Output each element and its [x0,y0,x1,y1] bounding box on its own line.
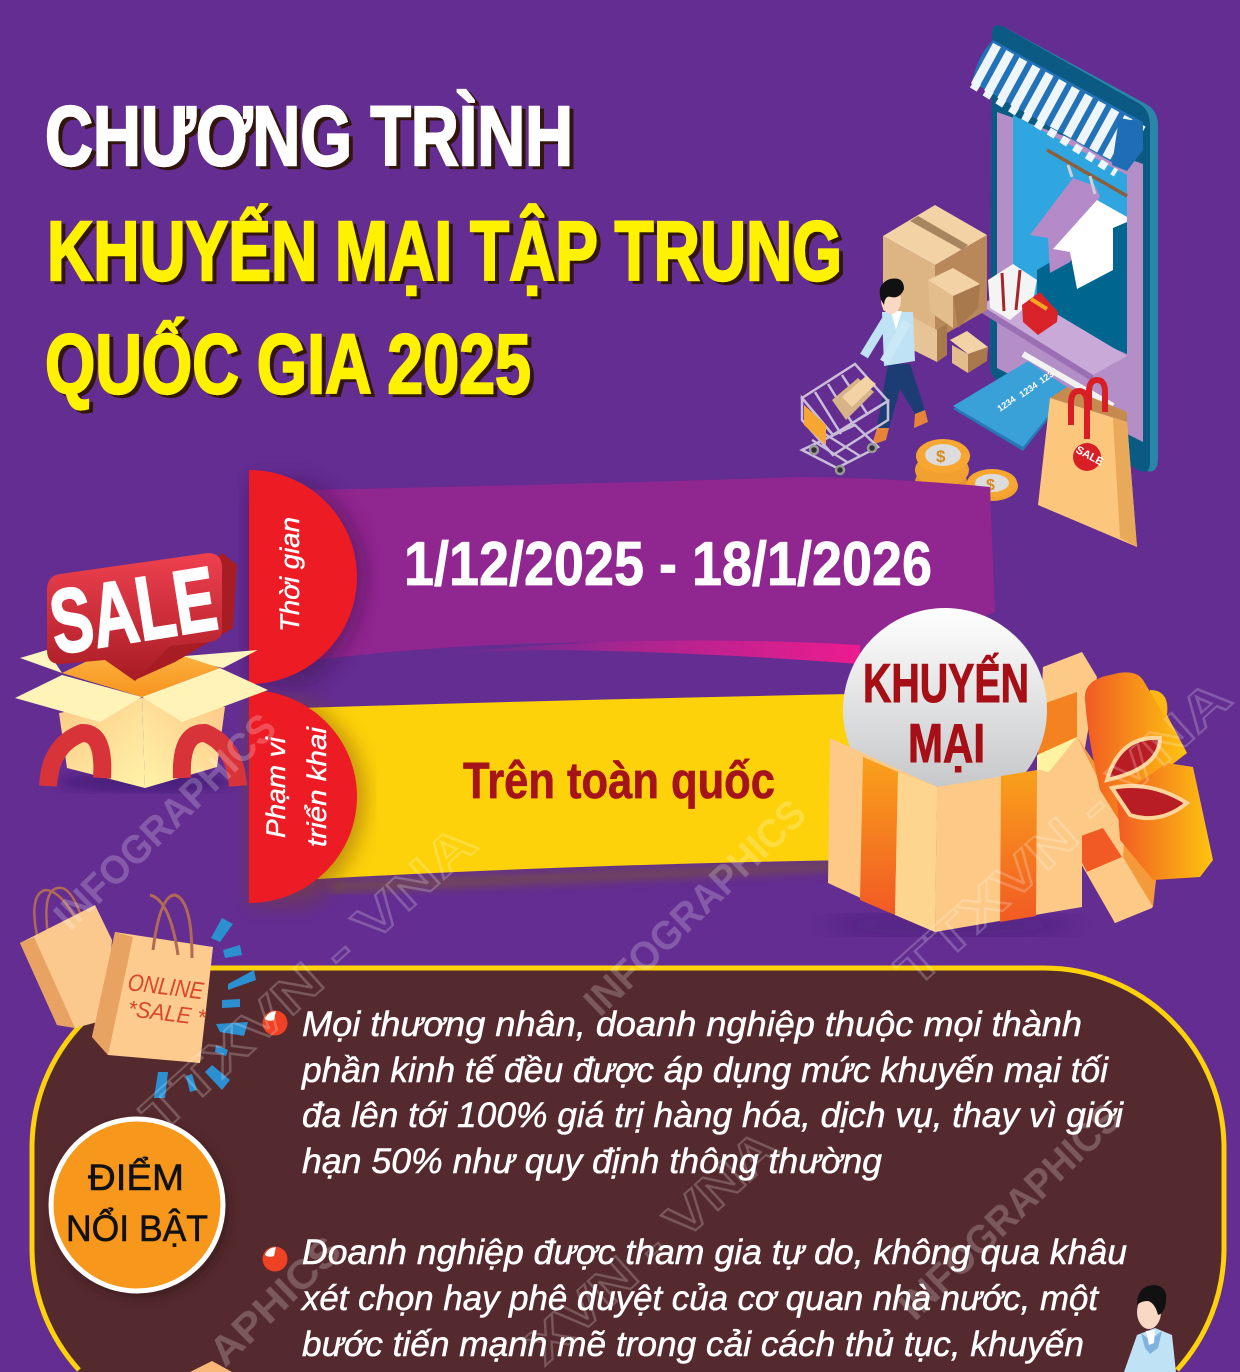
scope text: Trên toàn quốc [463,752,775,809]
watermark: infographics and agency marks: TTXVN - VNA [130,814,487,1143]
shopper [864,278,928,445]
bullet 1 text: hạn 50% như quy định thông thường [302,1142,883,1181]
badge: điểm nổi bật [51,1119,229,1298]
ball text: KHUYẾN [863,652,1029,714]
bullet 1 text [301,1005,1124,1181]
icon: gift box with promotion ball [825,608,1213,935]
badge: điểm nổi bật: ĐIỂM [88,1156,184,1198]
yellow ribbon [300,694,850,880]
credit card: 1234 [1017,380,1040,400]
tab: phạm vi triển khai [249,690,365,903]
watermark: infographics and agency marks [46,669,1240,1372]
shopping bag with sale tag: SALE [1074,444,1105,468]
front bag [92,895,213,1063]
shelf with gifts [980,264,1127,382]
watermark: infographics and agency marks: TTXVN - VNA [885,669,1240,998]
phone [990,26,1158,472]
promotion ball [843,608,1047,812]
sale tag [43,549,237,681]
coins: $ [986,477,995,494]
purple ribbon [300,477,995,665]
coins [915,439,1018,501]
bow [1085,672,1213,880]
small orange element at bottom [190,1361,232,1372]
title [45,89,842,411]
back bag [20,888,112,1028]
hanging shirts [1030,150,1127,289]
icon: sale box [15,549,268,792]
bullet 2 text [300,1233,1127,1364]
bullet 2 text: xét chọn hay phê duyệt của cơ quan nhà nước, một [300,1279,1099,1318]
bullet 1 text: đa lên tới 100% giá trị hàng hóa, dịch vụ, thay vì giới [302,1096,1124,1135]
shadow under ribbon [330,862,840,892]
top flap [1037,652,1097,787]
shopping cart [802,364,888,474]
box front [828,738,937,932]
title: CHƯƠNG TRÌNH [45,89,573,183]
bag label: ONLINE [126,969,206,1005]
watermark: infographics and agency marks: APHICS [201,1228,350,1372]
boxes [883,205,988,373]
credit card: 1234 [1037,366,1060,386]
tab: phạm vi triển khai: Phạm vi [261,736,291,838]
pink glow [430,640,860,664]
badge: điểm nổi bật: NỔI BẬT [66,1206,208,1249]
right flap [1037,737,1153,923]
watermark: infographics and agency marks: INFOGRAPHICS [46,705,285,938]
bullet 2 text: Doanh nghiệp được tham gia tự do, không qua khâu [302,1233,1127,1272]
watermark: infographics and agency marks: INFOGRAPHICS [891,1095,1130,1328]
band: scope [300,694,850,892]
bullet 1 icon [262,1010,288,1036]
front bag: *SALE * [126,995,208,1031]
red ribbons [48,733,102,786]
illustration: woman bottom right [1124,1285,1176,1372]
tab: phạm vi triển khai: triển khai [302,726,332,847]
illustration: online shop on smartphone with shopper [802,26,1158,547]
ball text [863,652,1029,774]
blue rays [154,918,256,1098]
bullet 1 text: Mọi thương nhân, doanh nghiệp thuộc mọi thành [302,1005,1082,1044]
shopping bag with sale tag [1038,380,1137,547]
shadow [825,915,1075,935]
ball text: MẠI [908,712,985,774]
credit card [953,354,1113,451]
tab: thời gian [249,470,365,684]
title: QUỐC GIA 2025 [45,317,531,411]
watermark: infographics and agency marks: INFOGRAPHICS [576,791,815,1024]
panel: highlights [32,968,1224,1372]
credit card: 1234 [995,394,1018,414]
tab: thời gian: Thời gian [275,517,305,632]
awning [972,40,1143,173]
watermark: infographics and agency marks: XVN - VNA [515,1118,790,1372]
sale tag: SALE [43,549,223,674]
title: KHUYẾN MẠI TẬP TRUNG [47,204,842,298]
icon: online sale bags [20,888,256,1098]
bullet 1 text: phần kinh tế đều được áp dụng mức khuyến mại tối [301,1051,1109,1090]
band: time [300,477,995,665]
bullet 2 icon [262,1246,288,1272]
bullet 2 text: bước tiến mạnh mẽ trong cải cách thủ tục, khuyến [302,1325,1084,1364]
coins: $ [936,447,946,466]
date: 1/12/2025 - 18/1/2026 [404,530,932,599]
